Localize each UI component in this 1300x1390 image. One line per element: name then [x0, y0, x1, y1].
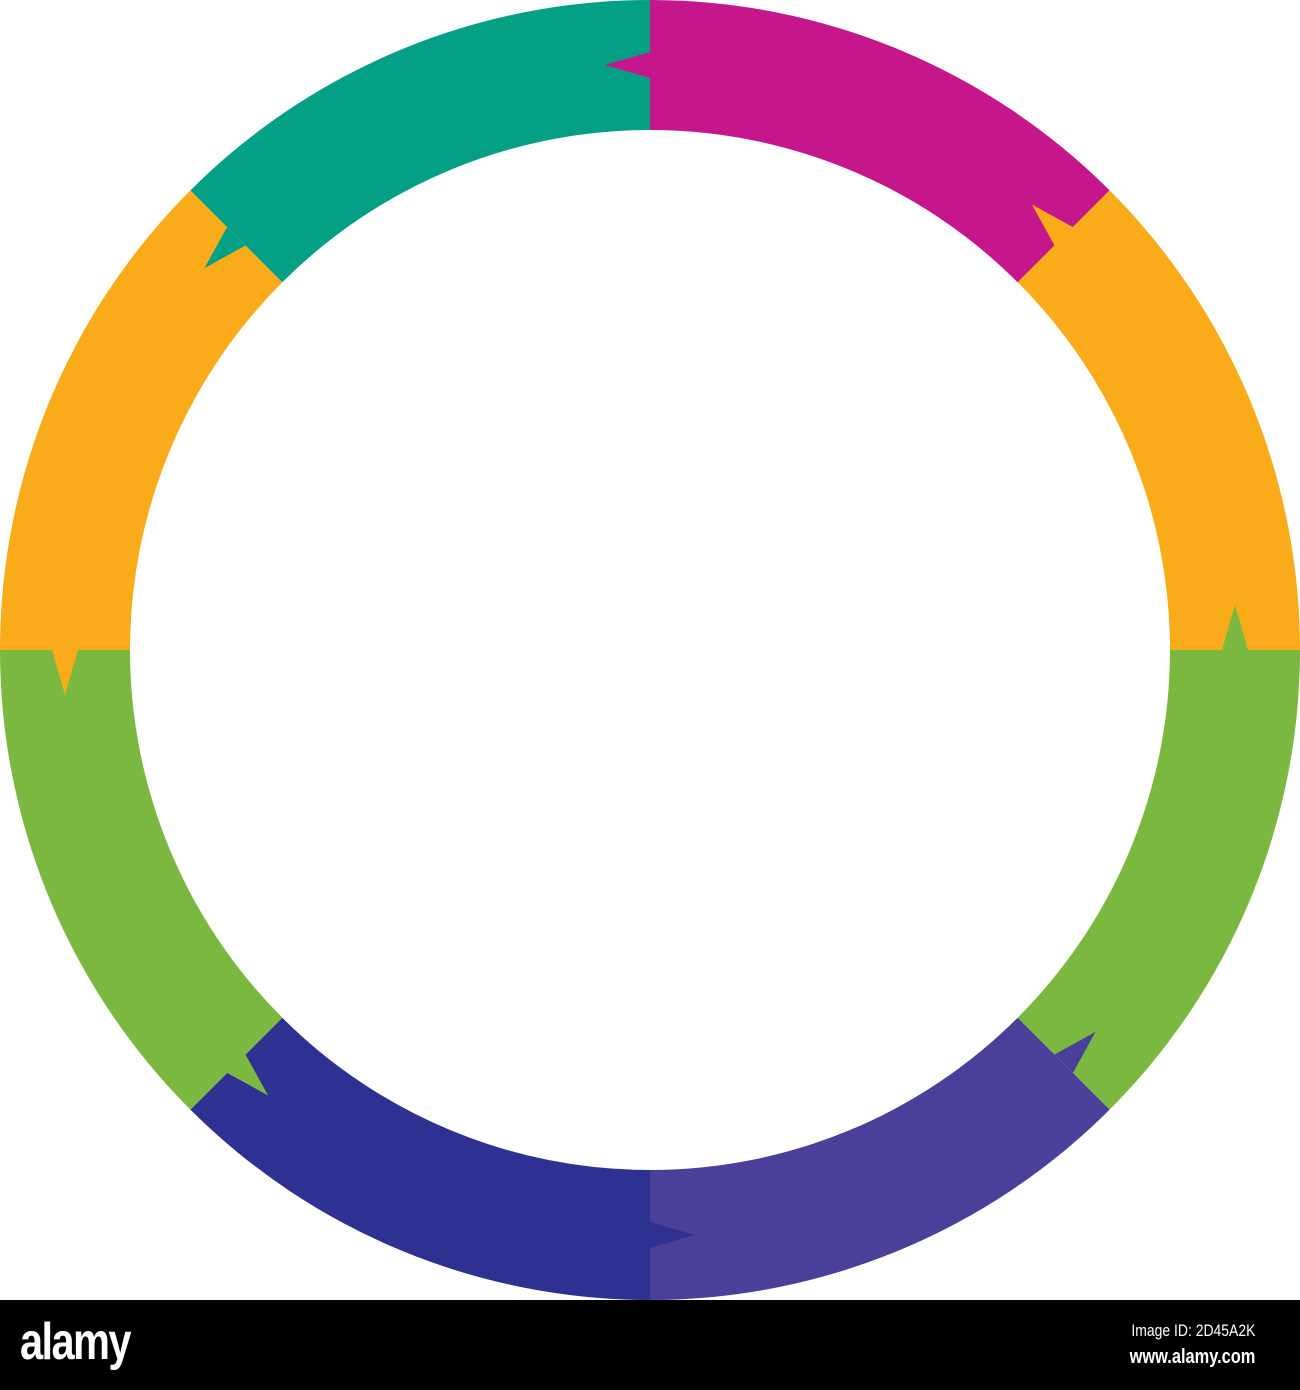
image id text: [1129, 1321, 1256, 1368]
arrow spikes: [52, 52, 1248, 1248]
segment: teal: [190, 0, 650, 282]
segment: navy: [190, 1018, 650, 1300]
logo: alamy: alamy: [20, 1313, 130, 1371]
segment: orange left: [0, 190, 282, 650]
segment: orange right: [1018, 190, 1300, 650]
footer bar: [0, 1300, 1300, 1390]
segment: green right: [1018, 650, 1300, 1110]
segment: purple: [650, 1018, 1110, 1300]
segment: magenta: [650, 0, 1110, 282]
image id text: Image ID: 2D45A2K: [1131, 1321, 1255, 1340]
image id text: www.alamy.com: [1129, 1346, 1255, 1368]
segment: green left: [0, 650, 282, 1110]
